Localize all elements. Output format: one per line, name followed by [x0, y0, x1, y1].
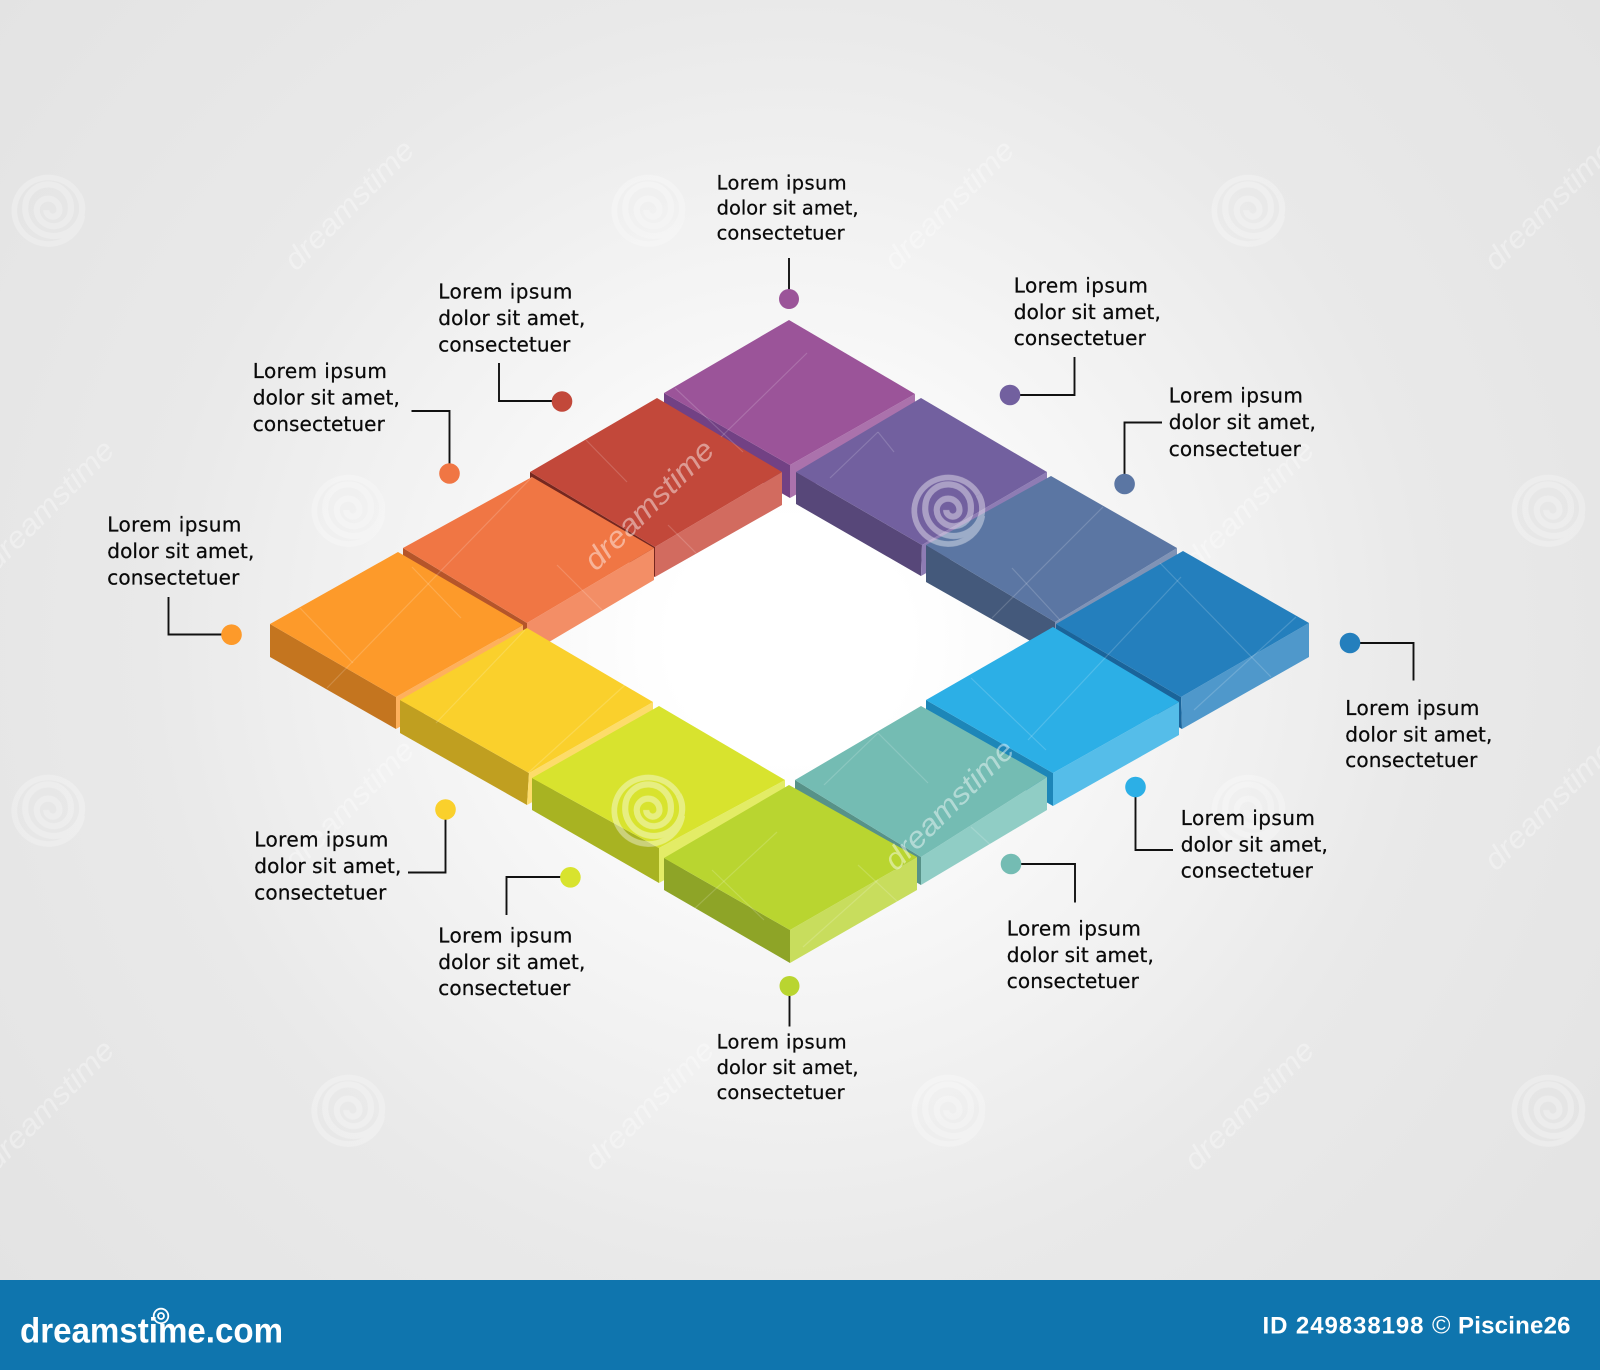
image id and credit: ID 249838198	[1262, 1312, 1424, 1340]
callout: teal: Lorem ipsum	[1007, 916, 1141, 940]
banner logo wordmark: dreamstime.com	[20, 1312, 283, 1350]
callout: steel blue: consectetuer	[1169, 437, 1302, 461]
footer banner	[0, 1280, 1600, 1370]
callout: green, bottom: Lorem ipsum	[717, 1031, 847, 1054]
block: lime	[532, 706, 785, 883]
callout: amber: Lorem ipsum	[107, 512, 241, 536]
callout: lime: dolor sit amet,	[438, 950, 585, 974]
block: teal	[795, 706, 1047, 885]
callout: yellow: dolor sit amet,	[254, 854, 401, 878]
block: violet	[796, 398, 1047, 576]
callout: green, bottom: dolor sit amet,	[717, 1056, 859, 1079]
callout: green, bottom: consectetuer	[717, 1081, 845, 1104]
callout: blue: consectetuer	[1345, 748, 1478, 772]
callout: orange	[253, 359, 460, 484]
callout: blue	[1340, 633, 1492, 772]
callout: light blue: consectetuer	[1181, 859, 1314, 883]
watermark: wordmarks on the blocks: dreamstime	[878, 733, 1021, 877]
callout: red: dolor sit amet,	[438, 306, 585, 330]
callout: yellow: Lorem ipsum	[254, 828, 388, 852]
watermark: diagonal wordmarks behind the diagram: dreamstime	[278, 133, 421, 277]
callout: amber: consectetuer	[107, 565, 240, 589]
callout: teal: dolor sit amet,	[1007, 943, 1154, 967]
watermark: diagonal wordmarks behind the diagram: dreamstime	[578, 1033, 721, 1177]
callout: purple, top	[717, 171, 859, 309]
callout: violet: Lorem ipsum	[1014, 274, 1148, 298]
callout: light blue: dolor sit amet,	[1181, 833, 1328, 857]
diagram: isometric diamond of twelve blocks	[270, 320, 1309, 963]
banner logo spiral	[154, 1309, 168, 1323]
callout: blue: Lorem ipsum	[1345, 696, 1479, 720]
callout: blue: dolor sit amet,	[1345, 723, 1492, 747]
watermark: diagonal wordmarks behind the diagram: dreamstime	[278, 733, 421, 877]
watermark: diagonal wordmarks behind the diagram	[0, 133, 1600, 1177]
callout: purple, top: Lorem ipsum	[717, 171, 847, 194]
callout: orange: dolor sit amet,	[253, 386, 400, 410]
block: yellow	[400, 628, 653, 805]
callout: light blue: Lorem ipsum	[1181, 806, 1315, 830]
image id and credit: ©	[1432, 1312, 1451, 1340]
watermark: wordmarks on the blocks	[578, 433, 1021, 877]
block: amber	[270, 552, 523, 729]
block: orange	[403, 477, 654, 655]
callout: violet: dolor sit amet,	[1014, 300, 1161, 324]
callout: yellow	[254, 799, 456, 905]
callout: lime: Lorem ipsum	[438, 924, 572, 948]
callout: violet: consectetuer	[1014, 326, 1147, 350]
watermark: spiral marks behind the diagram	[14, 177, 1582, 1144]
block: red	[530, 398, 782, 577]
callout: purple, top: consectetuer	[717, 222, 845, 245]
callout: teal	[1001, 854, 1154, 993]
block: purple	[664, 320, 915, 498]
callout: violet	[1000, 274, 1161, 405]
watermark: diagonal wordmarks behind the diagram: dreamstime	[878, 133, 1021, 277]
callout: light blue	[1125, 777, 1328, 883]
callout: lime: consectetuer	[438, 976, 571, 1000]
watermark: diagonal wordmarks behind the diagram: dreamstime	[1178, 433, 1321, 577]
block: green	[664, 785, 917, 963]
callout: green, bottom	[717, 976, 859, 1104]
callout: steel blue: dolor sit amet,	[1169, 410, 1316, 434]
image id and credit: Piscine26	[1458, 1312, 1570, 1340]
watermark: spirals on the blocks	[614, 477, 982, 844]
watermark: diagonal wordmarks behind the diagram: dreamstime	[1178, 1033, 1321, 1177]
callout: red: Lorem ipsum	[438, 280, 572, 304]
callout: lime	[438, 867, 585, 1000]
watermark: wordmarks on the blocks: dreamstime	[578, 433, 721, 577]
watermark: thin lines and marks over the blocks	[300, 353, 1296, 947]
callout: steel blue: Lorem ipsum	[1169, 384, 1303, 408]
callout: orange: Lorem ipsum	[253, 359, 387, 383]
callout: teal: consectetuer	[1007, 969, 1140, 993]
callout: yellow: consectetuer	[254, 881, 387, 905]
callout: red	[438, 280, 585, 412]
callout: purple, top: dolor sit amet,	[717, 196, 859, 219]
callout: red: consectetuer	[438, 332, 571, 356]
callout: steel blue	[1114, 384, 1316, 494]
block: light blue	[926, 627, 1179, 806]
callout: orange: consectetuer	[253, 412, 386, 436]
block: blue	[1056, 551, 1309, 729]
callout: amber	[107, 512, 254, 645]
block: steel blue	[926, 476, 1177, 655]
callout: amber: dolor sit amet,	[107, 539, 254, 563]
